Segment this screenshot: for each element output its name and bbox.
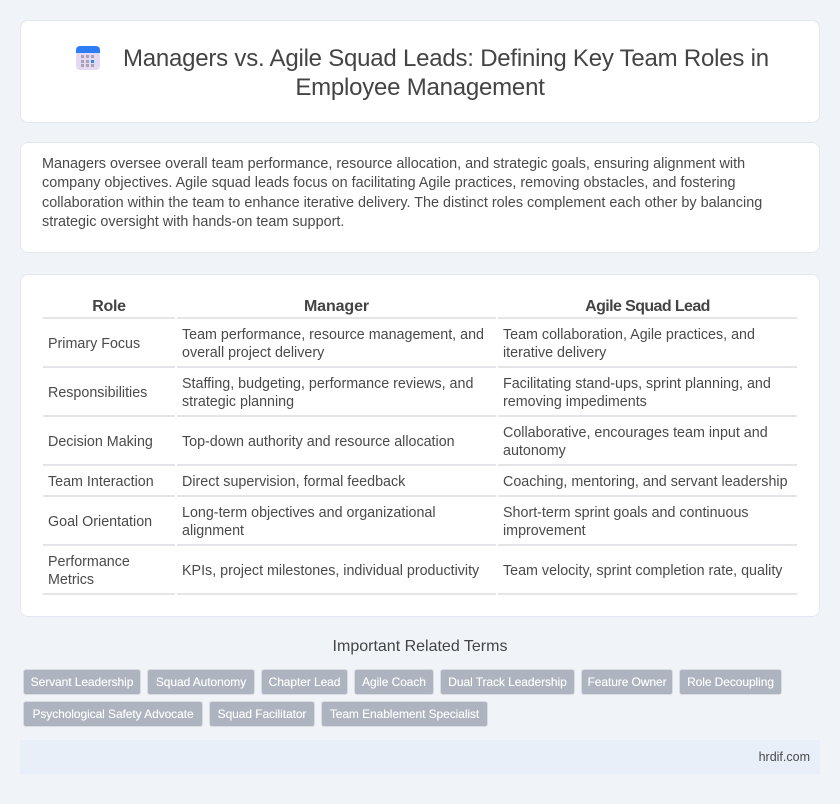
related term tags: Team Enablement Specialist bbox=[330, 707, 479, 721]
title: Managers vs. Agile Squad Leads: Defining Key Team Roles in bbox=[123, 45, 769, 72]
comparison table: strategic planning bbox=[182, 394, 294, 410]
panel: title card bbox=[20, 20, 820, 123]
comparison table: Top-down authority and resource allocation bbox=[182, 434, 455, 450]
related term tags: Agile Coach bbox=[362, 675, 426, 689]
comparison table: removing impediments bbox=[503, 394, 647, 410]
intro text: company objectives. Agile squad leads focus on facilitating Agile practices, removing obstacles, and fostering bbox=[42, 175, 736, 191]
intro text bbox=[42, 156, 762, 230]
icon: calendar bbox=[76, 46, 100, 70]
related term tags: Chapter Lead bbox=[269, 675, 340, 689]
header row: Manager bbox=[304, 298, 369, 315]
comparison table: Team performance, resource management, and bbox=[182, 327, 484, 343]
comparison table: Facilitating stand-ups, sprint planning, and bbox=[503, 376, 771, 392]
header row: Role bbox=[92, 298, 126, 315]
row: team interaction: Team Interaction bbox=[48, 474, 154, 490]
footer source: hrdif.com bbox=[759, 750, 810, 764]
related term tags: Role Decoupling bbox=[687, 675, 774, 689]
panel: introduction bbox=[20, 142, 820, 253]
row: responsibilities: Responsibilities bbox=[48, 385, 147, 401]
comparison table: iterative delivery bbox=[503, 345, 606, 361]
heading: related terms: Important Related Terms bbox=[333, 638, 507, 655]
related term tags: Feature Owner bbox=[588, 675, 666, 689]
intro text: Managers oversee overall team performance, resource allocation, and strategic goals, ensuring alignment with bbox=[42, 156, 745, 172]
comparison table bbox=[43, 298, 797, 595]
row: performance metrics: Performance bbox=[48, 554, 130, 570]
comparison table: overall project delivery bbox=[182, 345, 324, 361]
row: goal orientation: Goal Orientation bbox=[48, 514, 152, 530]
title: Employee Management bbox=[295, 74, 545, 101]
comparison table: Team collaboration, Agile practices, and bbox=[503, 327, 755, 343]
title bbox=[123, 45, 769, 101]
related term tags: Squad Facilitator bbox=[218, 707, 306, 721]
row: performance metrics bbox=[48, 554, 130, 588]
related term tags: Squad Autonomy bbox=[156, 675, 246, 689]
panel: comparison table bbox=[20, 274, 820, 617]
row: performance metrics: Metrics bbox=[48, 572, 94, 588]
related term tags bbox=[23, 669, 782, 727]
related term tags: Servant Leadership bbox=[31, 675, 133, 689]
comparison table: Direct supervision, formal feedback bbox=[182, 474, 405, 490]
related term tags: Dual Track Leadership bbox=[448, 675, 567, 689]
related term tags: Psychological Safety Advocate bbox=[32, 707, 194, 721]
comparison table: improvement bbox=[503, 523, 586, 539]
footer bbox=[20, 740, 820, 774]
header row: Agile Squad Lead bbox=[585, 298, 710, 315]
intro text: strategic oversight with hands-on team support. bbox=[42, 214, 344, 230]
comparison table: alignment bbox=[182, 523, 244, 539]
comparison table: Collaborative, encourages team input and bbox=[503, 425, 768, 441]
comparison table: autonomy bbox=[503, 443, 566, 459]
comparison table: Team velocity, sprint completion rate, quality bbox=[503, 563, 782, 579]
row: decision making: Decision Making bbox=[48, 434, 153, 450]
comparison table: Short-term sprint goals and continuous bbox=[503, 505, 749, 521]
comparison table: Staffing, budgeting, performance reviews, and bbox=[182, 376, 473, 392]
comparison table: Coaching, mentoring, and servant leadership bbox=[503, 474, 788, 490]
intro text: collaboration within the team to enhance iterative delivery. The distinct roles complement each other by balancing bbox=[42, 195, 762, 211]
header row bbox=[92, 298, 710, 315]
comparison table: KPIs, project milestones, individual productivity bbox=[182, 563, 479, 579]
comparison table: Long-term objectives and organizational bbox=[182, 505, 436, 521]
row: primary focus: Primary Focus bbox=[48, 336, 140, 352]
